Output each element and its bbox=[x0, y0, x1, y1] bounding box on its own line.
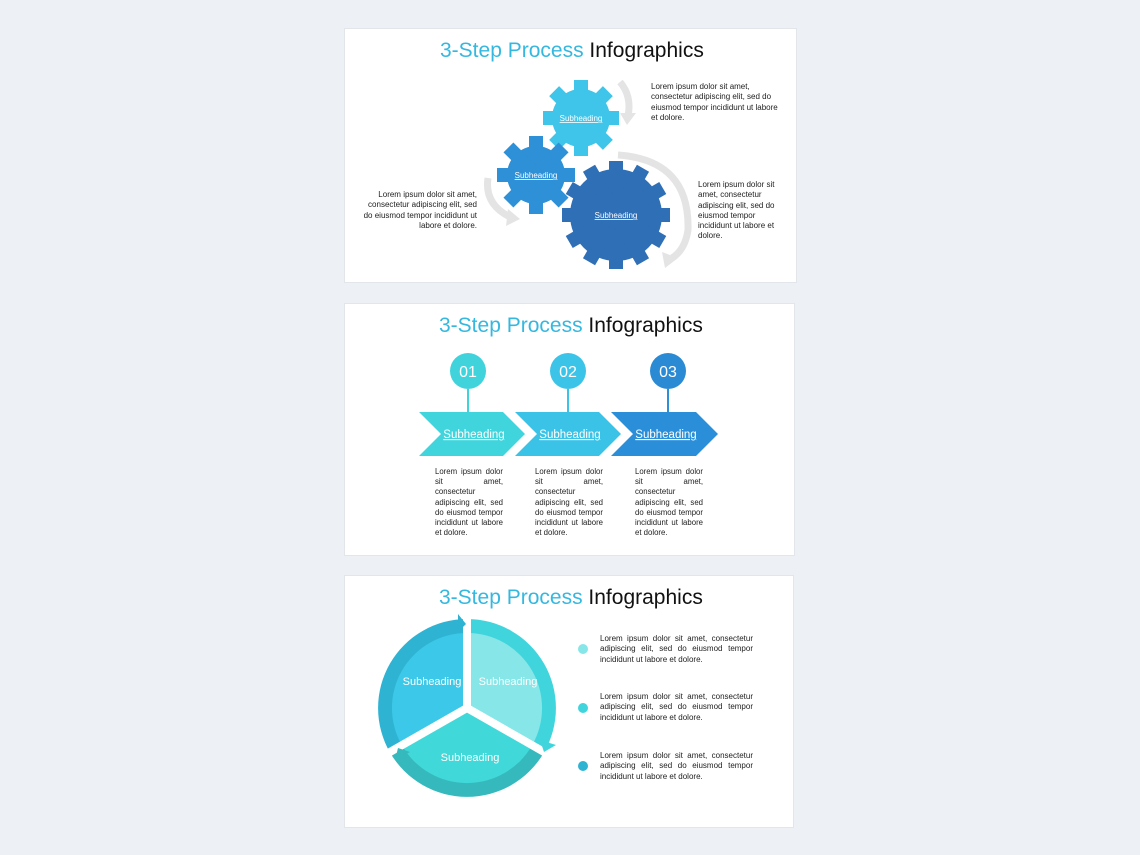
step 01 marker: 01 bbox=[459, 364, 477, 381]
title 1: 3-Step Process Infographics bbox=[440, 39, 704, 62]
chevron 2: Subheading bbox=[539, 429, 601, 441]
chevron 2 bbox=[515, 412, 621, 456]
text: gear 1: Lorem ipsum dolor sit amet, consectetur adipiscing elit, sed do eiusmod tempor incididunt ut labore et dolore. bbox=[651, 82, 778, 122]
chevron 1: Subheading bbox=[443, 429, 505, 441]
cycle diagram bbox=[378, 612, 556, 797]
panel: gears bbox=[344, 28, 797, 283]
arrows: gray arcs panel 1 bbox=[488, 82, 688, 258]
step 01 marker bbox=[450, 353, 486, 413]
panel: circle bbox=[344, 575, 794, 828]
icon: gear 2 bbox=[497, 136, 575, 214]
bullets bbox=[578, 644, 588, 771]
text: bullet 2: Lorem ipsum dolor sit amet, consectetur adipiscing elit, sed do eiusmod tempor incididunt ut labore et dolore. bbox=[600, 692, 753, 722]
text: gear 2: Lorem ipsum dolor sit amet, consectetur adipiscing elit, sed do eiusmod tempor incididunt ut labore et dolore. bbox=[364, 190, 477, 230]
cycle diagram: Subheading bbox=[403, 676, 461, 688]
chevron 1 bbox=[419, 412, 525, 456]
panel: chevrons bbox=[344, 303, 795, 556]
chevron 3: Subheading bbox=[635, 429, 697, 441]
step 03 marker bbox=[650, 353, 686, 413]
step 02 marker: 02 bbox=[559, 364, 577, 381]
step 03 marker: 03 bbox=[659, 364, 677, 381]
text: bullet 3: Lorem ipsum dolor sit amet, consectetur adipiscing elit, sed do eiusmod tempor incididunt ut labore et dolore. bbox=[600, 751, 753, 781]
step 02 marker bbox=[550, 353, 586, 413]
icon: gear 3 bbox=[562, 161, 670, 269]
text: gear 3: Lorem ipsum dolor sit amet, consectetur adipiscing elit, sed do eiusmod tempor incididunt ut labore et dolore. bbox=[698, 180, 774, 240]
icon: gear 1 bbox=[543, 80, 619, 156]
chevron 3 bbox=[611, 412, 718, 456]
text: step 1: Lorem ipsum dolor sit amet, consectetur adipiscing elit, sed do eiusmod tempor incididunt ut labore et dolore. bbox=[435, 467, 503, 537]
title 2: 3-Step Process Infographics bbox=[439, 314, 703, 337]
cycle diagram: Subheading bbox=[441, 752, 499, 764]
icon: gear 2: Subheading bbox=[515, 171, 557, 180]
icon: gear 1: Subheading bbox=[560, 114, 602, 123]
text: step 3: Lorem ipsum dolor sit amet, consectetur adipiscing elit, sed do eiusmod tempor incididunt ut labore et dolore. bbox=[635, 467, 703, 537]
title 3: 3-Step Process Infographics bbox=[439, 586, 703, 609]
text: step 2: Lorem ipsum dolor sit amet, consectetur adipiscing elit, sed do eiusmod tempor incididunt ut labore et dolore. bbox=[535, 467, 603, 537]
icon: gear 3: Subheading bbox=[595, 211, 637, 220]
text: bullet 1: Lorem ipsum dolor sit amet, consectetur adipiscing elit, sed do eiusmod tempor incididunt ut labore et dolore. bbox=[600, 634, 753, 664]
cycle diagram: Subheading bbox=[479, 676, 537, 688]
